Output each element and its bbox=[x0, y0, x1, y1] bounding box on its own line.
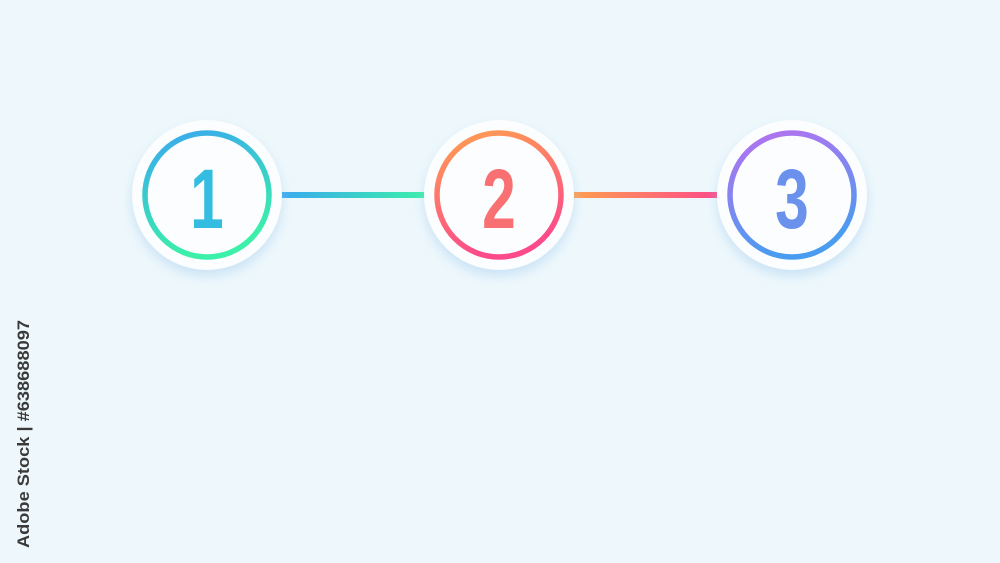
connector line 1-2 bbox=[280, 192, 428, 198]
step 2: 2 bbox=[482, 152, 516, 246]
step 1: 1 bbox=[190, 152, 224, 246]
step 1 bbox=[132, 120, 282, 270]
connector line 2-3 bbox=[572, 192, 720, 198]
watermark id text: Adobe Stock | #638688097 bbox=[14, 320, 33, 548]
step 2 bbox=[424, 120, 574, 270]
step 3 bbox=[717, 120, 867, 270]
step 3: 3 bbox=[775, 152, 809, 246]
